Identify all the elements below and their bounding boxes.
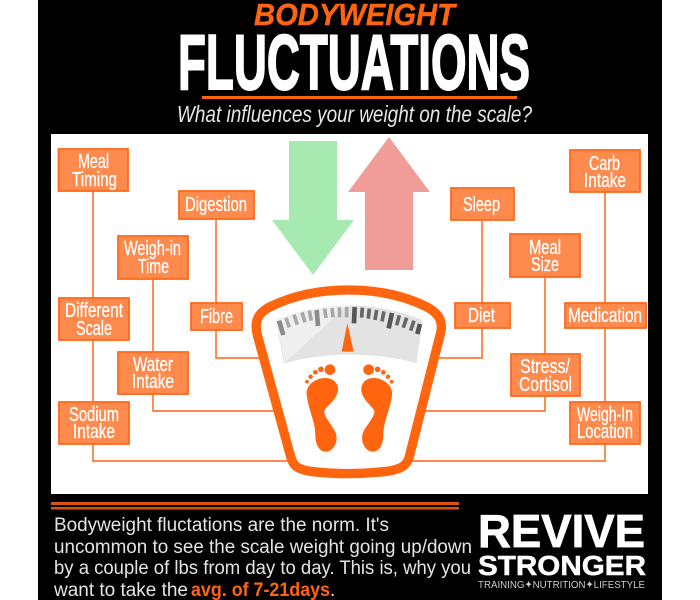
body text: Bodyweight fluctations are the norm. It's bbox=[54, 515, 389, 536]
box: Sodium Intake: Sodium bbox=[69, 404, 119, 426]
box: Carb Intake: Intake bbox=[584, 170, 626, 192]
gauge dial bbox=[276, 305, 422, 363]
logo: Revive Stronger: TRAINING✦NUTRITION✦LIFESTYLE bbox=[478, 579, 645, 591]
box: Fibre bbox=[191, 303, 242, 330]
logo: Revive Stronger: STRONGER bbox=[478, 550, 646, 581]
box: Sleep bbox=[451, 188, 514, 220]
box: Sleep: Sleep bbox=[463, 194, 500, 216]
body text bbox=[53, 515, 472, 600]
box: Sodium Intake: Intake bbox=[73, 421, 115, 443]
icon: bathroom scale bbox=[256, 290, 441, 474]
box: Medication: Medication bbox=[568, 305, 642, 327]
logo: Revive Stronger: REVIVE bbox=[478, 505, 645, 557]
box: Water Intake: Water bbox=[133, 354, 173, 376]
body text: by a couple of lbs from day to day. This is, why you bbox=[54, 558, 471, 579]
box: Carb Intake: Carb bbox=[589, 153, 620, 175]
box: Different Scale: Scale bbox=[76, 318, 112, 340]
box: Weigh-in Time bbox=[118, 236, 188, 279]
box: Different Scale: Different bbox=[65, 300, 123, 322]
box: Weigh-in Time: Time bbox=[138, 256, 169, 278]
box: Meal Size: Meal bbox=[529, 237, 561, 259]
box: Weigh-in Time: Weigh-in bbox=[124, 238, 181, 260]
box: Digestion bbox=[179, 191, 254, 219]
box: Weigh-In Location bbox=[570, 402, 640, 444]
box: Weigh-In Location: Weigh-In bbox=[577, 404, 633, 426]
box: Water Intake bbox=[118, 352, 188, 394]
logo: Revive Stronger bbox=[478, 505, 646, 591]
box: Weigh-In Location: Location bbox=[577, 421, 633, 443]
box: Digestion: Digestion bbox=[185, 194, 247, 216]
box: Stress/Cortisol: Stress/ bbox=[520, 356, 570, 378]
icon: green down arrow bbox=[272, 141, 354, 275]
icon: left foot bbox=[305, 364, 338, 452]
double divider bars bbox=[51, 502, 459, 510]
white diagram panel bbox=[51, 134, 648, 494]
icon: right foot bbox=[361, 364, 393, 452]
body text: uncommon to see the scale weight going up/down bbox=[54, 537, 472, 558]
box: Water Intake: Intake bbox=[132, 371, 174, 393]
box: Stress/Cortisol bbox=[511, 354, 580, 396]
box: Stress/Cortisol: Cortisol bbox=[519, 374, 572, 396]
box: Sodium Intake bbox=[59, 402, 129, 444]
box: Meal Timing: Timing bbox=[72, 169, 117, 191]
box: Diet: Diet bbox=[468, 305, 495, 327]
title underline bbox=[202, 96, 517, 99]
box: Carb Intake bbox=[570, 150, 640, 192]
box: Meal Size: Size bbox=[531, 254, 559, 276]
box: Diet bbox=[455, 303, 510, 328]
box: Fibre: Fibre bbox=[200, 306, 233, 328]
box: Meal Timing bbox=[58, 149, 128, 191]
box: Meal Size bbox=[510, 234, 580, 277]
icon: red up arrow bbox=[348, 137, 430, 270]
box: Meal Timing: Meal bbox=[78, 151, 109, 173]
connector lines bbox=[93, 191, 605, 461]
subtitle: What influences your weight on the scale? bbox=[177, 101, 532, 127]
gauge needle bbox=[342, 323, 354, 352]
box: Different Scale bbox=[59, 298, 129, 340]
